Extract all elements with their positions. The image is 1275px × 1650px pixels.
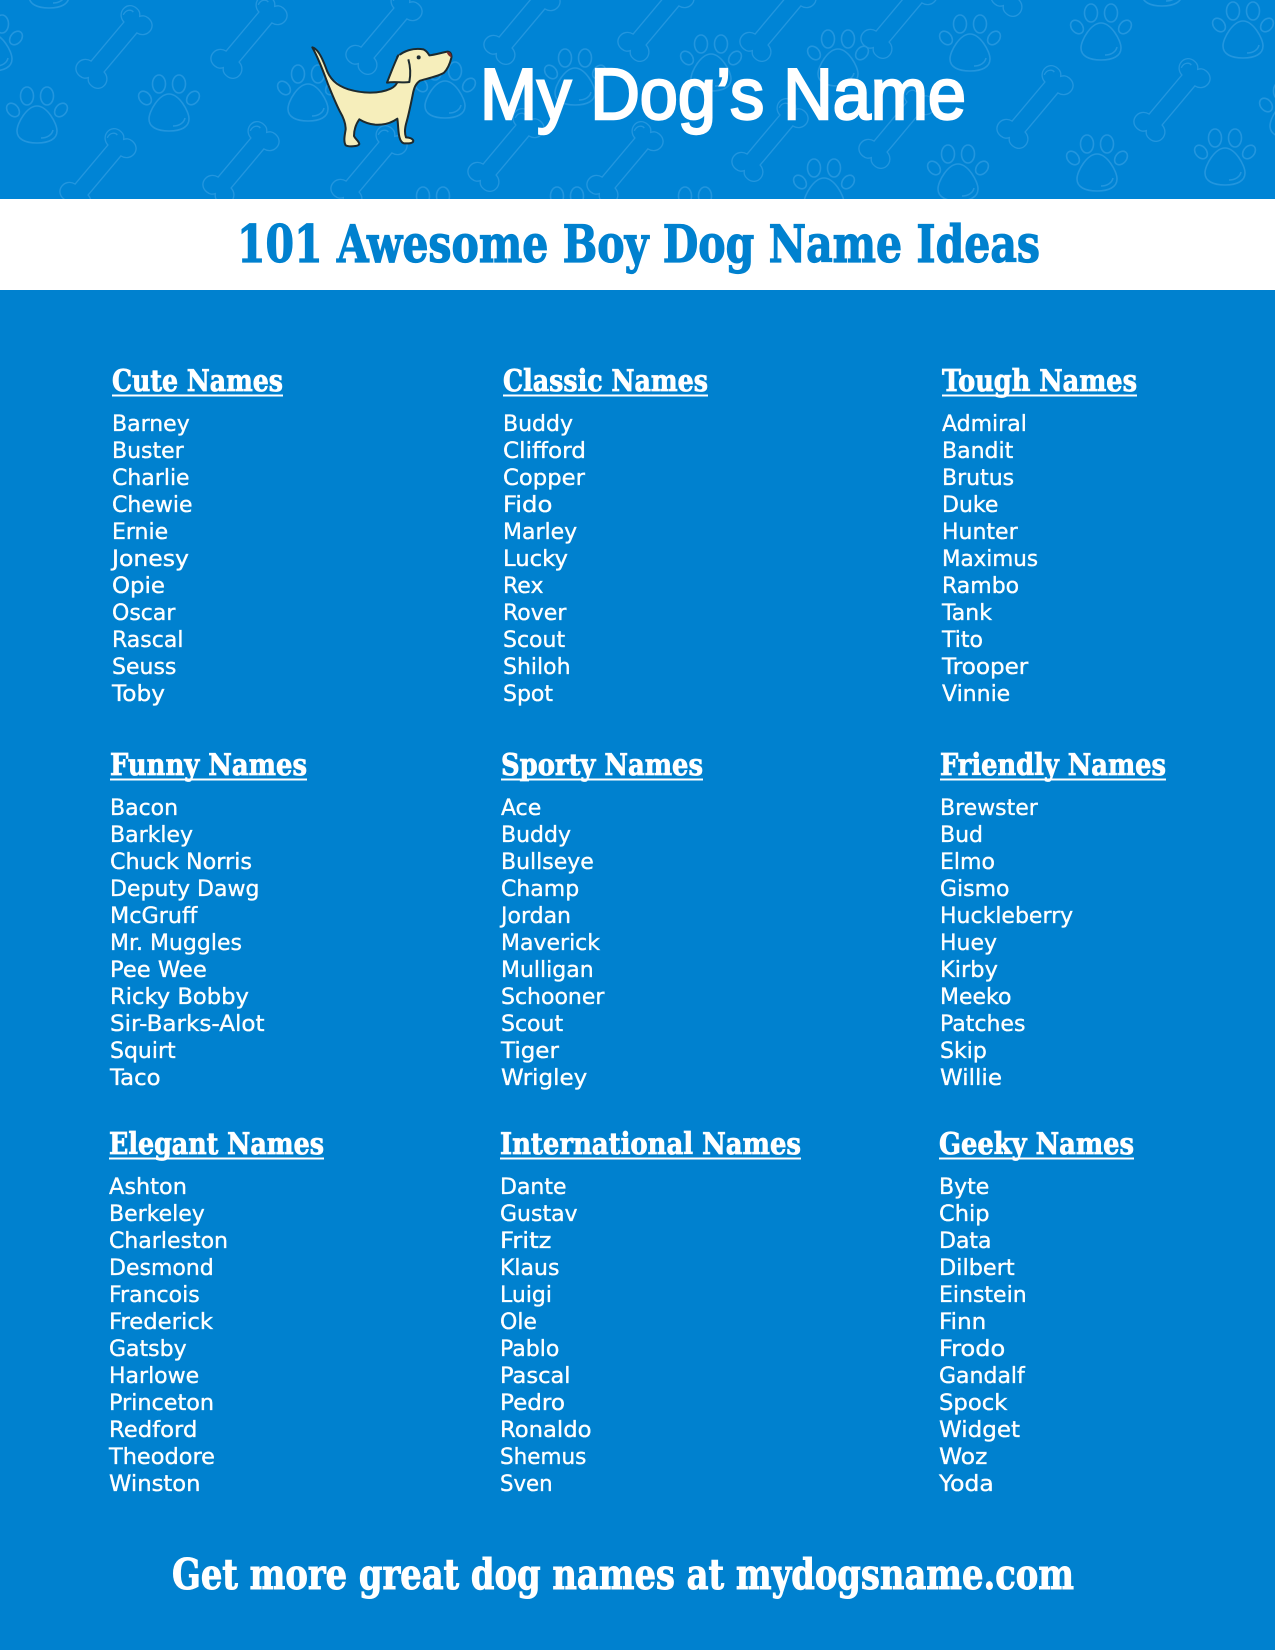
heading: Tough Names bbox=[942, 364, 1137, 399]
panel: cute names bbox=[110, 364, 283, 707]
name list: Princeton bbox=[109, 1391, 214, 1416]
name list: McGruff bbox=[110, 904, 198, 929]
name list: Ronaldo bbox=[500, 1418, 592, 1443]
header banner with bone and paw pattern bbox=[0, 0, 1275, 199]
name list: Pee Wee bbox=[110, 958, 207, 983]
name list: Ace bbox=[501, 796, 541, 821]
panel: tough names bbox=[941, 364, 1137, 707]
name list: Tito bbox=[941, 628, 983, 653]
name list: Toby bbox=[111, 682, 165, 707]
name list: Pablo bbox=[500, 1337, 559, 1362]
name list: Frodo bbox=[939, 1337, 1005, 1362]
white title band bbox=[0, 199, 1275, 290]
name list: Seuss bbox=[112, 655, 176, 680]
name list: Schooner bbox=[501, 985, 605, 1010]
name list: Winston bbox=[109, 1472, 200, 1497]
name list: Willie bbox=[940, 1066, 1002, 1091]
panel: geeky names bbox=[938, 1127, 1134, 1497]
name list: Bandit bbox=[942, 439, 1014, 464]
heading: International Names bbox=[500, 1127, 801, 1162]
name list: Deputy Dawg bbox=[110, 877, 259, 902]
name list: Charlie bbox=[112, 466, 190, 491]
name list: Squirt bbox=[110, 1039, 176, 1064]
name list: Pascal bbox=[500, 1364, 570, 1389]
name list: Chewie bbox=[112, 493, 192, 518]
name list: Lucky bbox=[503, 547, 568, 572]
name list: Buddy bbox=[501, 823, 571, 848]
name list: Shemus bbox=[500, 1445, 586, 1470]
name list: Patches bbox=[940, 1012, 1025, 1037]
name list: Brutus bbox=[942, 466, 1014, 491]
name list: Jonesy bbox=[110, 547, 189, 572]
name list: Tank bbox=[941, 601, 992, 626]
heading: Friendly Names bbox=[940, 748, 1166, 783]
name list: Fido bbox=[503, 493, 552, 518]
name list: Maximus bbox=[942, 547, 1038, 572]
heading: Sporty Names bbox=[501, 748, 703, 783]
name list: Admiral bbox=[942, 412, 1027, 437]
name list: Dilbert bbox=[939, 1256, 1015, 1281]
name list: Rambo bbox=[942, 574, 1019, 599]
name list: Yoda bbox=[938, 1472, 994, 1497]
name list: Opie bbox=[112, 574, 165, 599]
name list: Francois bbox=[109, 1283, 200, 1308]
name list: Redford bbox=[109, 1418, 197, 1443]
name list: Bud bbox=[940, 823, 983, 848]
name list: Shiloh bbox=[503, 655, 571, 680]
name list: Clifford bbox=[503, 439, 586, 464]
name list: Sir-Barks-Alot bbox=[110, 1012, 265, 1037]
name list: Data bbox=[939, 1229, 992, 1254]
icon: yellow dog logo bbox=[312, 47, 451, 146]
name list: Chuck Norris bbox=[110, 850, 252, 875]
name list: Buddy bbox=[503, 412, 573, 437]
name list: Ashton bbox=[109, 1175, 187, 1200]
name list: Marley bbox=[503, 520, 577, 545]
name list: Frederick bbox=[109, 1310, 213, 1335]
name list: Widget bbox=[939, 1418, 1020, 1443]
name list: Trooper bbox=[941, 655, 1029, 680]
heading: Funny Names bbox=[110, 748, 307, 783]
name list: Gismo bbox=[940, 877, 1010, 902]
name list: Klaus bbox=[500, 1256, 559, 1281]
name list: Duke bbox=[942, 493, 998, 518]
name list: Chip bbox=[939, 1202, 990, 1227]
name list: Scout bbox=[503, 628, 565, 653]
name list: Barkley bbox=[110, 823, 193, 848]
name list: Oscar bbox=[112, 601, 176, 626]
name list: Copper bbox=[503, 466, 586, 491]
name list: Ernie bbox=[112, 520, 168, 545]
title: 101 Awesome Boy Dog Name Ideas bbox=[237, 215, 1040, 275]
name list: Einstein bbox=[939, 1283, 1027, 1308]
name list: Tiger bbox=[500, 1039, 560, 1064]
name list: Bullseye bbox=[501, 850, 594, 875]
name list: Sven bbox=[500, 1472, 553, 1497]
name list: Wrigley bbox=[501, 1066, 587, 1091]
name list: Huckleberry bbox=[940, 904, 1073, 929]
name list: Gatsby bbox=[109, 1337, 187, 1362]
panel: friendly names bbox=[940, 748, 1166, 1091]
name list: Taco bbox=[109, 1066, 160, 1091]
name list: Byte bbox=[939, 1175, 989, 1200]
name list: Finn bbox=[939, 1310, 986, 1335]
name list: Barney bbox=[112, 412, 190, 437]
heading: Geeky Names bbox=[939, 1127, 1134, 1162]
heading: Elegant Names bbox=[109, 1127, 324, 1162]
name list: Jordan bbox=[499, 904, 571, 929]
name list: Rascal bbox=[112, 628, 183, 653]
name list: Elmo bbox=[940, 850, 995, 875]
heading: Classic Names bbox=[503, 364, 708, 399]
name list: Harlowe bbox=[109, 1364, 199, 1389]
name list: Luigi bbox=[500, 1283, 552, 1308]
name list: Desmond bbox=[109, 1256, 214, 1281]
name list: Mulligan bbox=[501, 958, 594, 983]
heading: Cute Names bbox=[112, 364, 283, 399]
panel: classic names bbox=[503, 364, 708, 707]
name list: Maverick bbox=[501, 931, 600, 956]
name list: Ole bbox=[500, 1310, 537, 1335]
name list: Champ bbox=[501, 877, 579, 902]
name list: Spot bbox=[503, 682, 553, 707]
name list: Berkeley bbox=[109, 1202, 205, 1227]
name list: Kirby bbox=[940, 958, 998, 983]
name list: Charleston bbox=[109, 1229, 228, 1254]
name list: Spock bbox=[939, 1391, 1008, 1416]
name list: Bacon bbox=[110, 796, 178, 821]
name list: Gandalf bbox=[939, 1364, 1026, 1389]
panel: funny names bbox=[109, 748, 307, 1091]
name list: Vinnie bbox=[942, 682, 1010, 707]
name list: Huey bbox=[940, 931, 997, 956]
name list: Brewster bbox=[940, 796, 1039, 821]
brand wordmark: My Dog’s Name bbox=[480, 55, 966, 135]
panel: international names bbox=[500, 1127, 801, 1497]
name list: Rover bbox=[503, 601, 567, 626]
name list: Skip bbox=[940, 1039, 987, 1064]
name list: Fritz bbox=[500, 1229, 552, 1254]
name list: Scout bbox=[501, 1012, 563, 1037]
name list: Theodore bbox=[108, 1445, 215, 1470]
name list: Buster bbox=[112, 439, 185, 464]
name list: Hunter bbox=[942, 520, 1019, 545]
name list: Dante bbox=[500, 1175, 567, 1200]
panel: elegant names bbox=[108, 1127, 324, 1497]
name list: Pedro bbox=[500, 1391, 565, 1416]
name list: Mr. Muggles bbox=[110, 931, 242, 956]
name list: Ricky Bobby bbox=[110, 985, 249, 1010]
footer call to action: Get more great dog names at mydogsname.com bbox=[172, 1550, 1074, 1599]
name list: Gustav bbox=[500, 1202, 578, 1227]
name list: Meeko bbox=[940, 985, 1011, 1010]
name list: Rex bbox=[503, 574, 543, 599]
name list: Woz bbox=[939, 1445, 987, 1470]
panel: sporty names bbox=[499, 748, 703, 1091]
